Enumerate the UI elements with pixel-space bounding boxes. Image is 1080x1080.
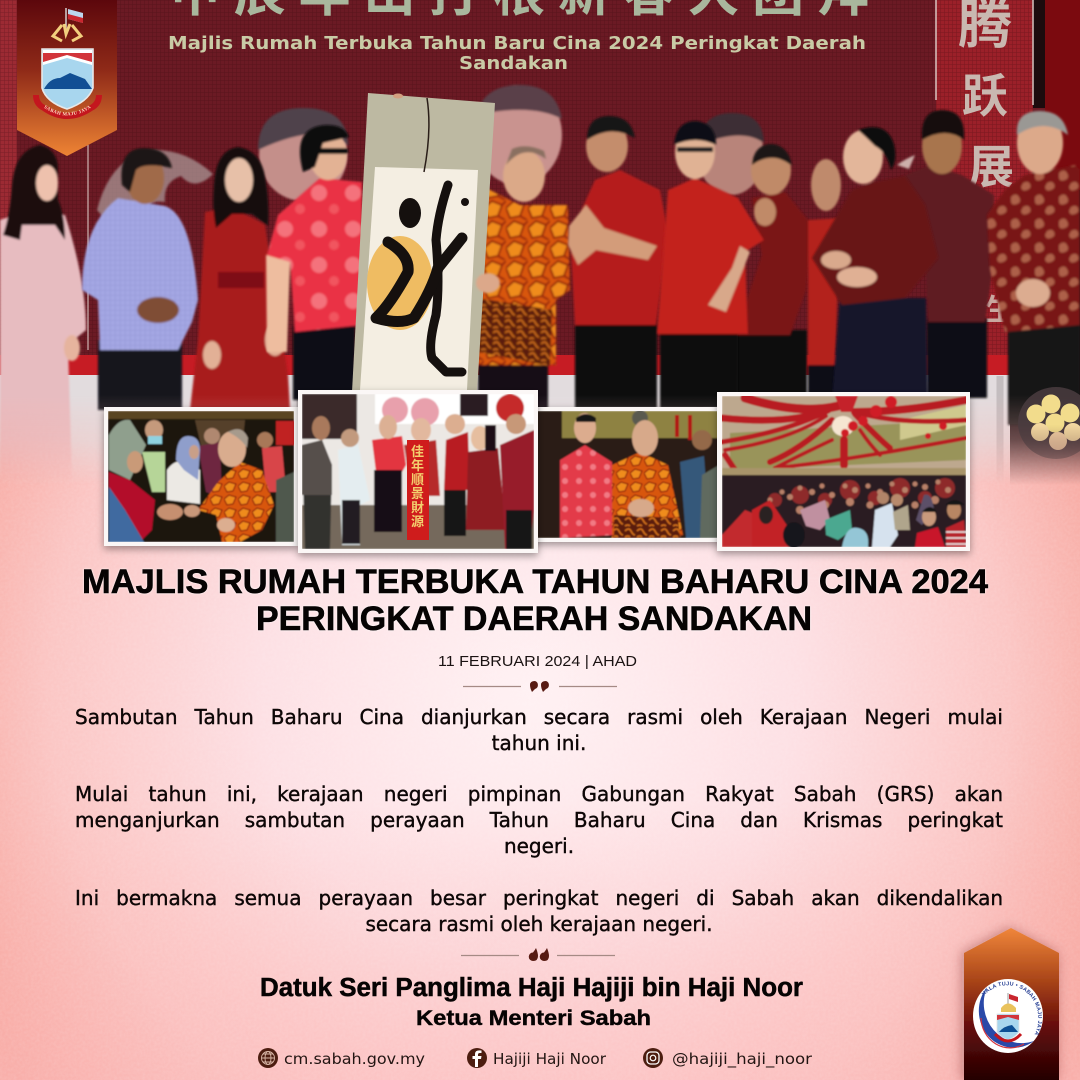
footer: facebook link: Hajiji Haji Noor: [493, 1050, 607, 1068]
closing quote divider: [461, 948, 615, 961]
motto ribbon: SABAH MAJU JAYA: [44, 105, 91, 116]
body paragraph two: Mulai tahun ini, kerajaan negeri pimpinan Gabungan Rakyat Sabah (GRS) akan: [75, 782, 1003, 806]
opening quote divider: [463, 681, 617, 692]
collage photo: greeting guests: [104, 407, 298, 546]
footer: instagram link: @hajiji_haji_noor: [672, 1050, 813, 1069]
main stage photo: [0, 0, 1080, 490]
photo collage: [104, 390, 970, 553]
body paragraph two: menganjurkan sambutan perayaan Tahun Baharu Cina dan Krismas peringkat: [75, 808, 1003, 832]
main title: MAJLIS RUMAH TERBUKA TAHUN BAHARU CINA 2024: [82, 563, 988, 601]
kris crest: [53, 24, 81, 41]
person: man in maroon jacket: [900, 110, 994, 398]
footer: website link: cm.sabah.gov.my: [284, 1050, 425, 1068]
top-left banner with Sabah crest: [17, 0, 117, 156]
person: man in dark red shirt: [735, 144, 812, 405]
body paragraph one: Sambutan Tahun Baharu Cina dianjurkan secara rasmi oleh Kerajaan Negeri mulai: [75, 705, 1003, 729]
date line: 11 FEBRUARI 2024 | AHAD: [438, 653, 637, 670]
body paragraph three: secara rasmi oleh kerajaan negeri.: [365, 912, 713, 936]
backdrop event title text: [170, 36, 864, 70]
body paragraph two: negeri.: [504, 834, 574, 858]
body paragraph three: Ini bermakna semua perayaan besar peringkat negeri di Sabah akan dikendalikan: [75, 886, 1003, 910]
backdrop chinese banner text: 跃: [962, 60, 1008, 126]
speaker role: Ketua Menteri Sabah: [416, 1007, 651, 1030]
backdrop chinese banner text: 展: [968, 131, 1014, 197]
person: man in orange batik hand: [476, 273, 500, 293]
collage photo: scroll group: 財: [411, 497, 424, 516]
collage photo: scroll group: [298, 390, 538, 553]
person: man in orange batik: [478, 146, 570, 410]
motto ribbon: [33, 95, 102, 119]
person: man in pink-red shirt: [266, 125, 362, 400]
person: woman in pink dress: [0, 145, 86, 480]
collage photo: scroll group: 佳: [411, 441, 424, 460]
collage photo: chief minister pair: [530, 407, 723, 542]
scroll painting: [352, 93, 495, 392]
person: man partly hidden behind: [808, 159, 841, 405]
flag: [66, 8, 83, 30]
backdrop chinese banner text: 生: [985, 285, 1015, 329]
footer: instagram link: [643, 1048, 813, 1069]
main title: PERINGKAT DAERAH SANDAKAN: [256, 600, 812, 638]
person: man in red shirt with glasses: [657, 121, 764, 408]
speaker name: Datuk Seri Panglima Haji Hajiji bin Haji Noor: [260, 974, 803, 1002]
stage skirt: [0, 190, 1080, 490]
person: man in red floral shirt: [987, 111, 1080, 425]
bottom-right banner with circular logo: [956, 924, 1064, 1080]
collage photo: banquet hall: [717, 392, 970, 551]
person: woman in red cheongsam: [190, 147, 290, 410]
backdrop event title text: Majlis Rumah Terbuka Tahun Baru Cina 2024 Peringkat Daerah: [168, 34, 866, 54]
backdrop chinese banner text: [169, 0, 1015, 329]
person: man in red shirt clapping: [568, 116, 668, 408]
person: man in blue shirt: [82, 148, 198, 410]
stage spotlight: [1018, 387, 1080, 459]
body paragraph one: [75, 705, 1003, 755]
circular logo: HALA TUJU • SABAH MAJU JAYA: [982, 982, 1042, 1034]
person: elderly man in maroon: [812, 127, 938, 400]
circular logo: [973, 979, 1043, 1053]
body paragraph one: tahun ini.: [492, 731, 586, 755]
collage photo: scroll group: 年: [411, 455, 424, 474]
collage photo: scroll group: 源: [411, 511, 424, 530]
backdrop event title text: Sandakan: [459, 54, 568, 74]
body paragraph two: [75, 782, 1003, 858]
shield: [42, 49, 93, 109]
LED backdrop: [0, 0, 1080, 355]
collage photo: scroll group: 景: [411, 483, 424, 502]
body paragraph three: [75, 886, 1003, 936]
backdrop portraits and dragon: [97, 85, 915, 232]
collage photo: scroll group: 順: [411, 469, 424, 488]
main title: [82, 563, 988, 638]
